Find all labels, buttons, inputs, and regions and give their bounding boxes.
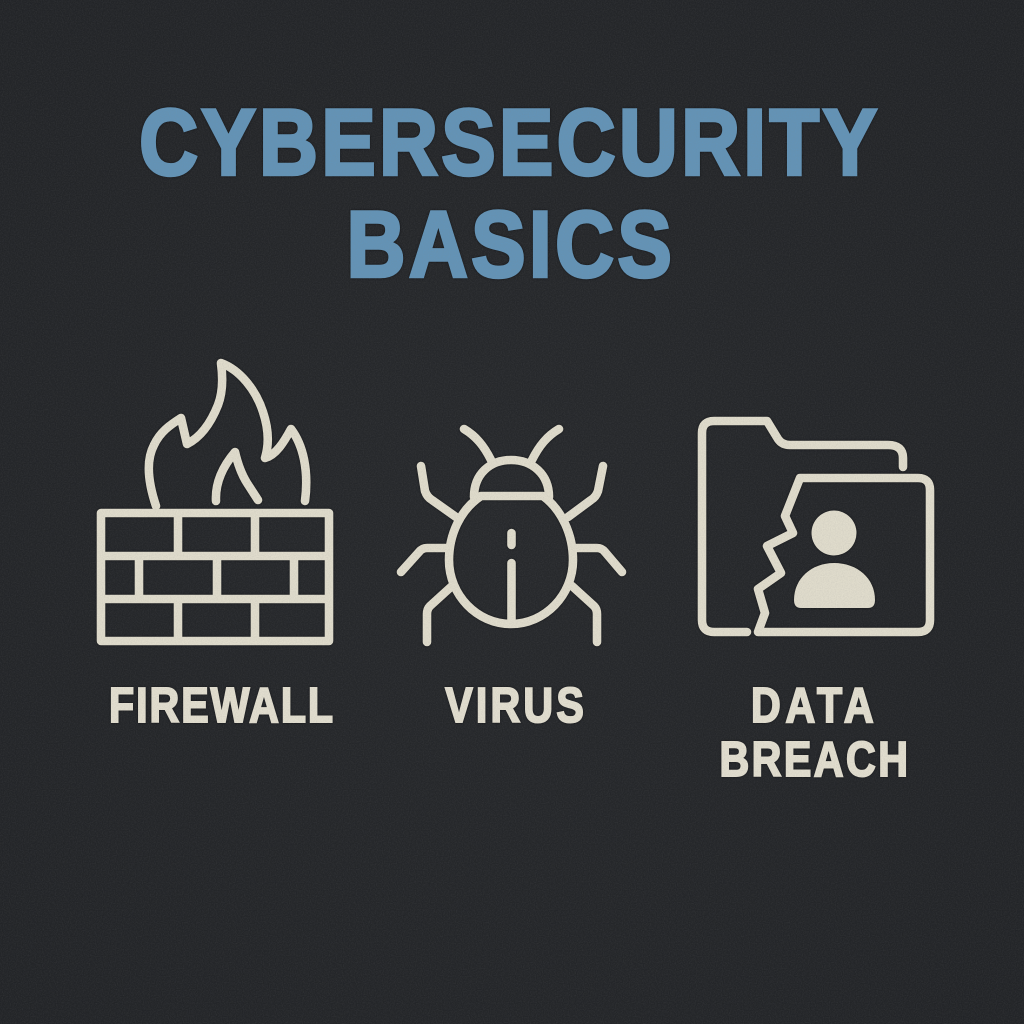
label: virus: VIRUS [445,678,584,733]
icon: brick wall [101,513,329,641]
icon: person [794,510,875,608]
label: firewall: FIREWALL [109,678,333,733]
panel: virus [401,429,622,733]
title line 2: BASICS [347,192,672,297]
bug marking [507,533,516,620]
panel: firewall [101,363,333,733]
icon: flame [149,363,306,506]
icon: back folder [702,421,903,632]
icon: torn front folder [758,478,930,632]
bug antennae [464,429,559,460]
title line 1: CYBERSECURITY [139,90,877,195]
bug body [449,496,573,624]
label: data: DATA [751,678,874,733]
title [139,90,877,297]
icon: bug [401,429,622,642]
bug legs [401,466,622,642]
panel: data breach [702,421,930,787]
label: breach: BREACH [719,732,908,787]
bug head [474,460,549,497]
